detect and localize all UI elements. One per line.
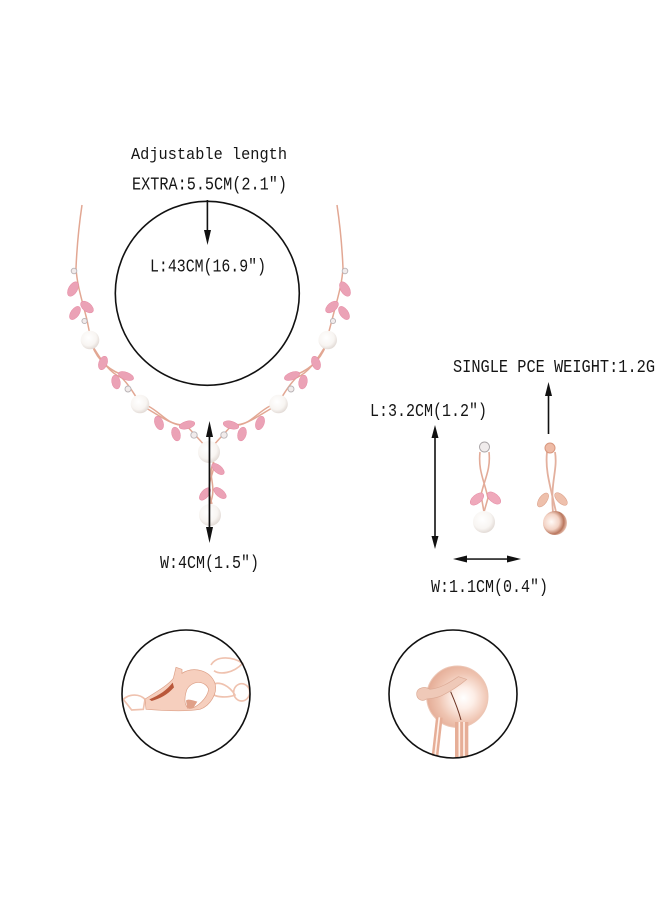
arrow: extra length down xyxy=(204,200,211,245)
clasp chain links xyxy=(123,658,250,710)
circle outline: ball back xyxy=(389,630,517,758)
arrow: earring length double-headed xyxy=(432,425,438,549)
earring back leaves xyxy=(535,491,569,509)
earring back xyxy=(535,443,569,535)
pink leaves xyxy=(65,280,353,502)
earring front wires xyxy=(480,452,489,512)
necklace length circle xyxy=(115,201,299,385)
earring front xyxy=(468,442,503,533)
ear post legs xyxy=(435,717,464,757)
rhinestones xyxy=(71,268,348,438)
clasp inner shade xyxy=(186,700,197,709)
necklace xyxy=(65,205,353,526)
wire shadow xyxy=(451,692,461,720)
label: necklace length: L:43CM(16.9") xyxy=(150,258,266,278)
necklace chain and vines xyxy=(76,205,343,504)
label: earring length: L:3.2CM(1.2") xyxy=(370,402,487,422)
pearls xyxy=(81,331,337,526)
earring back wires xyxy=(547,452,556,512)
arrow: pendant width double-headed xyxy=(206,421,213,543)
earring back ball xyxy=(543,511,567,535)
arrow: weight upward xyxy=(545,382,552,434)
label: extra length: EXTRA:5.5CM(2.1") xyxy=(132,176,287,196)
detail circle: ball back xyxy=(417,666,488,757)
ball xyxy=(427,666,488,727)
earring front rhinestone xyxy=(480,442,490,452)
earring front pearl xyxy=(473,511,495,533)
label: earring width: W:1.1CM(0.4") xyxy=(431,578,548,598)
heading: adjustable length: Adjustable length xyxy=(131,146,287,165)
clasp hook dark accent xyxy=(149,683,174,701)
knot loop xyxy=(417,677,467,700)
circle outline: clasp xyxy=(122,630,250,758)
earring front leaves xyxy=(468,489,503,508)
detail circle: lobster clasp xyxy=(123,658,250,711)
clasp body xyxy=(145,667,216,711)
arrow: earring width double-headed xyxy=(453,556,521,562)
label: pendant width: W:4CM(1.5") xyxy=(160,554,259,574)
earring back knot xyxy=(545,443,555,453)
